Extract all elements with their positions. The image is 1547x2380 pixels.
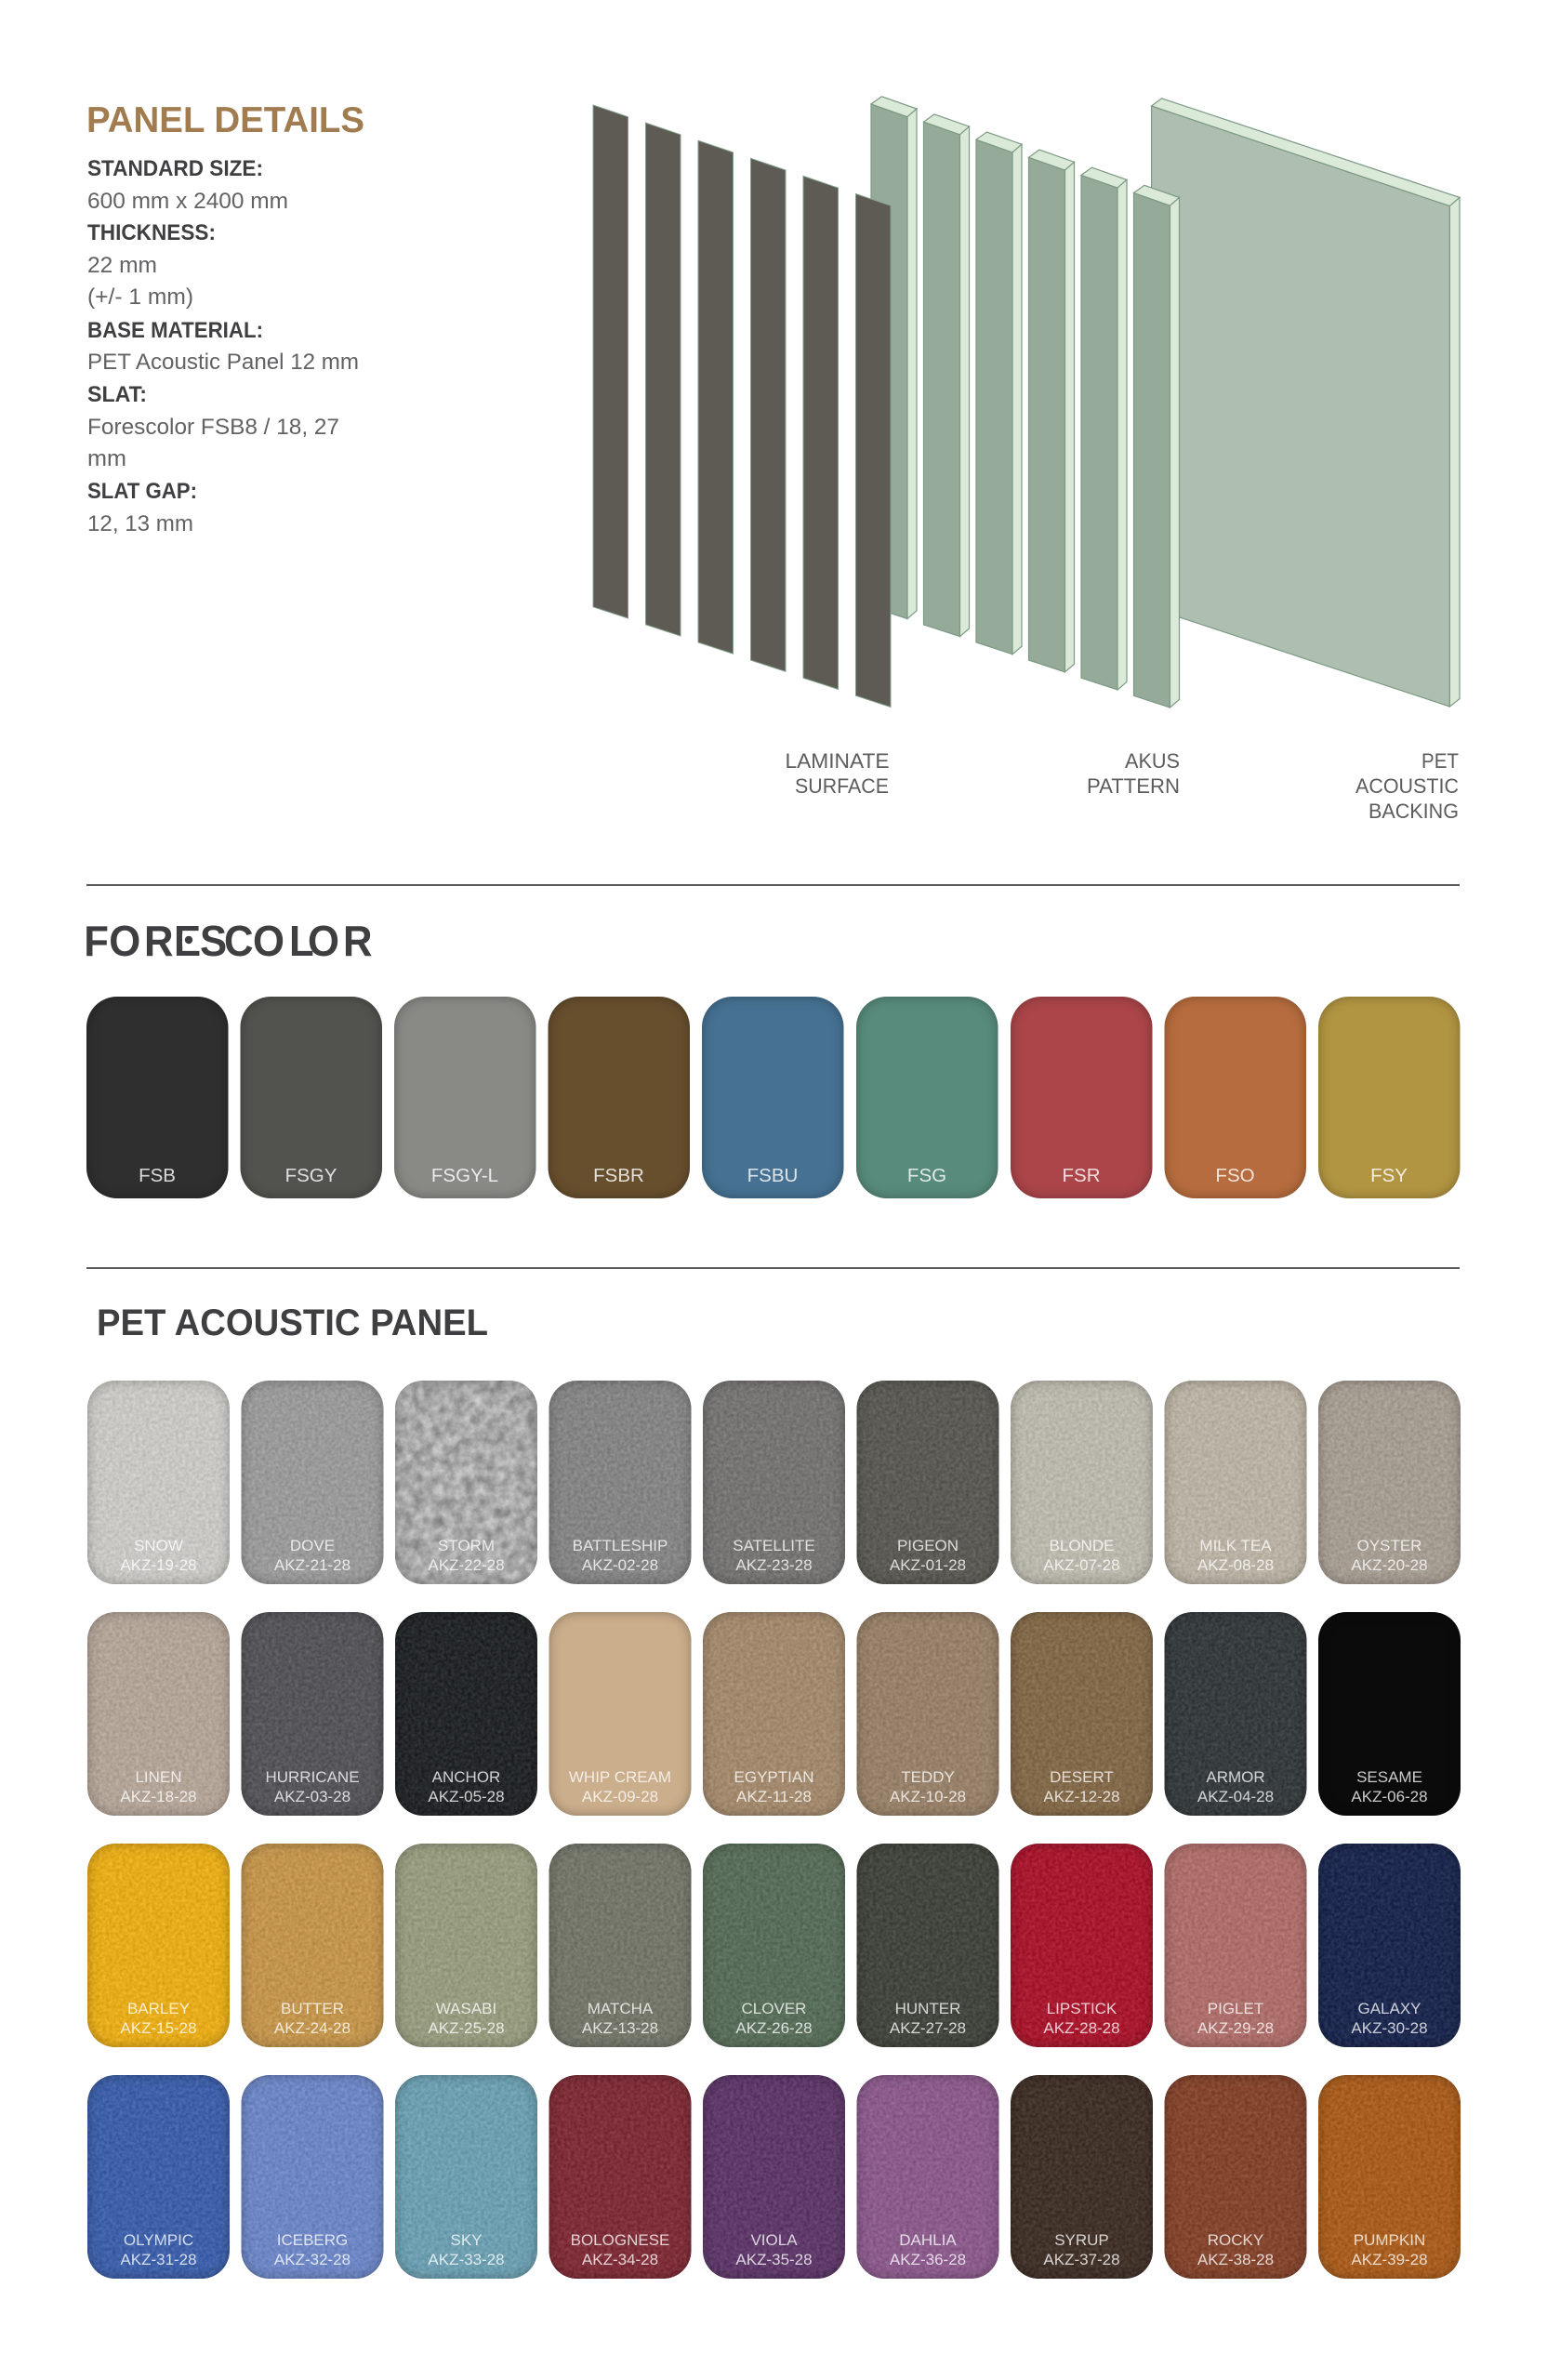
swatch: Storm	[395, 1381, 537, 1584]
swatch: Olympic: OLYMPIC	[124, 2231, 193, 2249]
exploded panel diagram	[593, 97, 1460, 707]
swatch: Storm: STORM	[438, 1537, 495, 1554]
PET acoustic panel swatches	[87, 1381, 1461, 2279]
swatch: Pumpkin	[1318, 2075, 1461, 2279]
swatch: Syrup: SYRUP	[1054, 2231, 1109, 2249]
label: akus pattern: AKUS	[1125, 749, 1180, 773]
swatch: Clover: CLOVER	[742, 2000, 806, 2017]
label: PET acoustic backing: ACOUSTIC	[1355, 774, 1459, 798]
swatch: Whip Cream: WHIP CREAM	[569, 1768, 671, 1786]
akus pattern green slats	[871, 97, 1179, 707]
swatch: Hurricane: HURRICANE	[265, 1768, 360, 1786]
swatch: Sesame: SESAME	[1356, 1768, 1422, 1786]
swatch: Viola	[703, 2075, 845, 2279]
swatch: FSO	[1164, 997, 1306, 1198]
swatch: Hurricane	[242, 1612, 383, 1816]
swatch: Piglet: AKZ-29-28	[1197, 2019, 1274, 2037]
swatch: Viola: VIOLA	[750, 2231, 798, 2249]
swatch: Hunter: HUNTER	[895, 2000, 960, 2017]
swatch: Rocky: AKZ-38-28	[1197, 2251, 1274, 2268]
swatch: Rocky: ROCKY	[1208, 2231, 1263, 2249]
swatch: Teddy: AKZ-10-28	[890, 1788, 966, 1805]
swatch: Olympic: AKZ-31-28	[120, 2251, 197, 2268]
swatch: Dahlia: DAHLIA	[899, 2231, 957, 2249]
swatch: Armor	[1164, 1612, 1307, 1816]
swatch: FSG	[856, 997, 998, 1198]
swatch: Storm: AKZ-22-28	[428, 1556, 505, 1574]
swatch: Snow: AKZ-19-28	[120, 1556, 197, 1574]
swatch: Satellite: SATELLITE	[733, 1537, 815, 1554]
swatch: Milk Tea: MILK TEA	[1199, 1537, 1272, 1554]
swatch: FSO: FSO	[1215, 1165, 1255, 1186]
swatch: FSBR	[549, 997, 690, 1198]
swatch: Desert: DESERT	[1050, 1768, 1114, 1786]
swatch: Satellite: AKZ-23-28	[735, 1556, 813, 1574]
swatch: Linen: AKZ-18-28	[120, 1788, 197, 1805]
label: laminate surface	[785, 749, 889, 798]
swatch: Butter	[242, 1844, 383, 2047]
swatch: Pigeon	[857, 1381, 998, 1584]
swatch: Anchor: AKZ-05-28	[428, 1788, 505, 1805]
swatch: FSBR: FSBR	[593, 1165, 644, 1186]
panel details specification list: STANDARD SIZE:	[87, 156, 263, 181]
swatch: Armor: ARMOR	[1206, 1768, 1265, 1786]
swatch: FSGY-L	[394, 997, 536, 1198]
swatch: FSR: FSR	[1062, 1165, 1101, 1186]
swatch: FSG: FSG	[907, 1165, 946, 1186]
swatch: Oyster	[1318, 1381, 1461, 1584]
swatch: Milk Tea: AKZ-08-28	[1197, 1556, 1274, 1574]
swatch: Syrup: AKZ-37-28	[1043, 2251, 1120, 2268]
swatch: Milk Tea	[1164, 1381, 1307, 1584]
swatch: Blonde: AKZ-07-28	[1043, 1556, 1120, 1574]
swatch: Oyster: AKZ-20-28	[1351, 1556, 1428, 1574]
Forescolor swatches	[86, 997, 1460, 1198]
swatch: Lipstick	[1011, 1844, 1153, 2047]
panel details specification list: SLAT GAP:	[87, 479, 197, 504]
label: PET acoustic backing	[1355, 749, 1459, 823]
heading: Forescolor logo: FORESCOLOR	[84, 917, 373, 965]
swatch: Battleship: BATTLESHIP	[573, 1537, 668, 1554]
swatch: Dahlia	[857, 2075, 998, 2279]
swatch: Blonde: BLONDE	[1050, 1537, 1114, 1554]
swatch: Bolognese	[549, 2075, 692, 2279]
swatch: Teddy	[857, 1612, 998, 1816]
swatch: Whip Cream	[549, 1612, 692, 1816]
swatch: Galaxy: GALAXY	[1357, 2000, 1421, 2017]
swatch: FSR	[1011, 997, 1153, 1198]
swatch: Dove	[242, 1381, 383, 1584]
panel details specification list: PET Acoustic Panel 12 mm	[87, 350, 359, 375]
swatch: Matcha: MATCHA	[588, 2000, 654, 2017]
swatch: Sky: SKY	[450, 2231, 483, 2249]
swatch: FSY	[1318, 997, 1460, 1198]
swatch: Butter: AKZ-24-28	[274, 2019, 350, 2037]
panel details specification list: 600 mm x 2400 mm	[87, 189, 288, 214]
swatch: Bolognese: AKZ-34-28	[582, 2251, 658, 2268]
swatch: Hurricane: AKZ-03-28	[274, 1788, 350, 1805]
panel details specification list: 22 mm	[87, 253, 157, 278]
swatch: FSBU: FSBU	[747, 1165, 798, 1186]
swatch: Dove: AKZ-21-28	[274, 1556, 350, 1574]
swatch: Wasabi: WASABI	[436, 2000, 496, 2017]
panel details specification list: mm	[87, 446, 126, 471]
swatch: Sesame	[1318, 1612, 1461, 1816]
swatch: Battleship	[549, 1381, 692, 1584]
swatch: Egyptian	[703, 1612, 845, 1816]
swatch: Piglet	[1164, 1844, 1307, 2047]
swatch: Pumpkin: AKZ-39-28	[1351, 2251, 1428, 2268]
swatch: Battleship: AKZ-02-28	[582, 1556, 658, 1574]
swatch: Rocky	[1164, 2075, 1307, 2279]
panel details specification list	[87, 156, 359, 536]
swatch: Matcha	[549, 1844, 692, 2047]
swatch: Satellite	[703, 1381, 845, 1584]
swatch: Olympic	[87, 2075, 230, 2279]
label: PET acoustic backing: BACKING	[1368, 800, 1459, 823]
swatch: Dahlia: AKZ-36-28	[890, 2251, 966, 2268]
swatch: Sky: AKZ-33-28	[428, 2251, 505, 2268]
swatch: Egyptian: EGYPTIAN	[734, 1768, 813, 1786]
swatch: Viola: AKZ-35-28	[735, 2251, 813, 2268]
swatch: Egyptian: AKZ-11-28	[736, 1788, 812, 1805]
swatch: Desert	[1011, 1612, 1153, 1816]
PET acoustic backing board	[1152, 99, 1460, 707]
swatch: Sky	[395, 2075, 537, 2279]
swatch: FSGY-L: FSGY-L	[431, 1165, 498, 1186]
swatch: Oyster: OYSTER	[1357, 1537, 1421, 1554]
laminate surface dark slats	[593, 105, 891, 707]
swatch: Snow: SNOW	[134, 1537, 183, 1554]
swatch: Teddy: TEDDY	[901, 1768, 955, 1786]
label: akus pattern	[1087, 749, 1180, 798]
swatch: Galaxy	[1318, 1844, 1461, 2047]
panel details specification list: SLAT:	[87, 382, 147, 407]
swatch: Pigeon: AKZ-01-28	[890, 1556, 966, 1574]
label: PET acoustic backing: PET	[1421, 749, 1459, 773]
panel details specification list: Forescolor FSB8 / 18, 27	[87, 415, 339, 440]
swatch: FSBU	[702, 997, 844, 1198]
swatch: FSGY: FSGY	[285, 1165, 337, 1186]
swatch: Lipstick: AKZ-28-28	[1043, 2019, 1120, 2037]
swatch: Iceberg	[242, 2075, 383, 2279]
swatch: Iceberg: AKZ-32-28	[274, 2251, 350, 2268]
swatch: FSB	[86, 997, 229, 1198]
swatch: Piglet: PIGLET	[1208, 2000, 1263, 2017]
swatch: Barley: AKZ-15-28	[120, 2019, 197, 2037]
label: laminate surface: LAMINATE	[785, 749, 889, 773]
heading: PET acoustic panel: PET ACOUSTIC PANEL	[97, 1302, 488, 1343]
swatch: Pigeon: PIGEON	[897, 1537, 959, 1554]
swatch: Desert: AKZ-12-28	[1043, 1788, 1120, 1805]
swatch: Clover	[703, 1844, 845, 2047]
panel details specification list: THICKNESS:	[87, 220, 216, 245]
swatch: Bolognese: BOLOGNESE	[571, 2231, 669, 2249]
swatch: FSB: FSB	[139, 1165, 176, 1186]
swatch: Butter: BUTTER	[281, 2000, 344, 2017]
swatch: FSGY	[240, 997, 382, 1198]
swatch: Matcha: AKZ-13-28	[582, 2019, 658, 2037]
swatch: Galaxy: AKZ-30-28	[1351, 2019, 1428, 2037]
label: laminate surface: SURFACE	[795, 774, 889, 798]
swatch: Blonde	[1011, 1381, 1153, 1584]
swatch: Syrup	[1011, 2075, 1153, 2279]
swatch: Linen: LINEN	[135, 1768, 182, 1786]
title: panel details: PANEL DETAILS	[86, 100, 364, 140]
swatch: Linen	[87, 1612, 230, 1816]
swatch: FSY: FSY	[1370, 1165, 1408, 1186]
panel details specification list: BASE MATERIAL:	[87, 318, 263, 343]
swatch: Anchor	[395, 1612, 537, 1816]
swatch: Sesame: AKZ-06-28	[1351, 1788, 1428, 1805]
label: akus pattern: PATTERN	[1087, 774, 1180, 798]
swatch: Pumpkin: PUMPKIN	[1354, 2231, 1425, 2249]
swatch: Wasabi	[395, 1844, 537, 2047]
swatch: Whip Cream: AKZ-09-28	[582, 1788, 658, 1805]
swatch: Wasabi: AKZ-25-28	[428, 2019, 505, 2037]
panel details specification list: (+/- 1 mm)	[87, 284, 193, 310]
panel details specification list: 12, 13 mm	[87, 511, 193, 536]
swatch: Barley: BARLEY	[127, 2000, 190, 2017]
swatch: Anchor: ANCHOR	[432, 1768, 500, 1786]
swatch: Barley	[87, 1844, 230, 2047]
swatch: Dove: DOVE	[290, 1537, 335, 1554]
swatch: Armor: AKZ-04-28	[1197, 1788, 1274, 1805]
swatch: Clover: AKZ-26-28	[735, 2019, 813, 2037]
swatch: Iceberg: ICEBERG	[277, 2231, 348, 2249]
swatch: Hunter: AKZ-27-28	[890, 2019, 966, 2037]
swatch: Lipstick: LIPSTICK	[1047, 2000, 1117, 2017]
swatch: Snow	[87, 1381, 230, 1584]
swatch: Hunter	[857, 1844, 998, 2047]
